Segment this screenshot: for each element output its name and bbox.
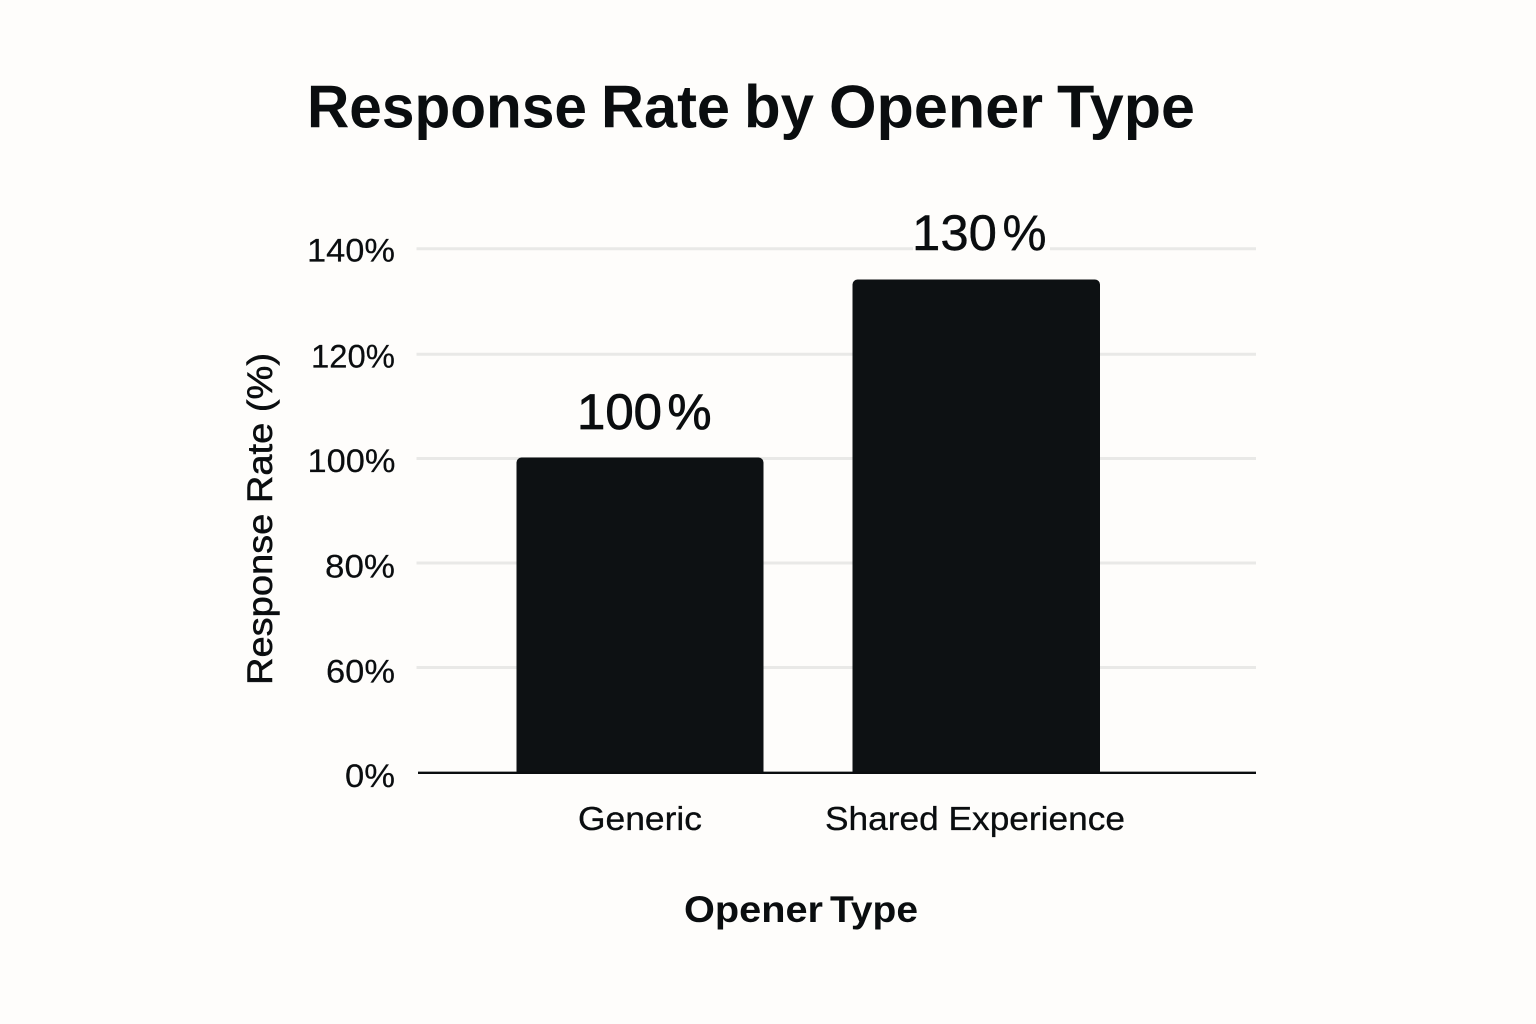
- value label: Generic: %: [668, 384, 712, 440]
- y axis tick labels: [307, 232, 396, 794]
- value label: Shared Experience: [912, 205, 1046, 261]
- bar: Generic: [516, 458, 764, 773]
- x axis title: [684, 889, 918, 930]
- x axis line: [418, 772, 1256, 774]
- y axis tick labels: 80%: [325, 548, 395, 584]
- title: Response: [307, 74, 587, 140]
- y axis tick labels: 100%: [308, 443, 396, 479]
- y axis tick labels: 140%: [307, 232, 395, 268]
- y axis tick labels: 60%: [326, 654, 395, 690]
- value label: Generic: 100: [577, 384, 662, 440]
- x axis category: Generic: Generic: [578, 800, 702, 837]
- title: Opener: [829, 74, 1043, 140]
- title: Type: [1057, 74, 1195, 140]
- title: Rate: [601, 74, 730, 140]
- title: by: [744, 74, 815, 140]
- y axis tick labels: 120%: [311, 338, 395, 374]
- bar: Shared Experience: [852, 280, 1100, 773]
- value label: Shared Experience: 130: [912, 205, 997, 261]
- value label: Generic: [577, 384, 712, 440]
- value label: Shared Experience: %: [1002, 205, 1046, 261]
- title: [307, 74, 1195, 140]
- x axis title: Opener: [684, 889, 823, 930]
- x axis category: Shared Experience: Shared Experience: [825, 800, 1125, 837]
- x axis title: Type: [830, 889, 918, 930]
- y axis title: Response Rate (%): [241, 353, 280, 685]
- y axis tick labels: 0%: [345, 758, 395, 794]
